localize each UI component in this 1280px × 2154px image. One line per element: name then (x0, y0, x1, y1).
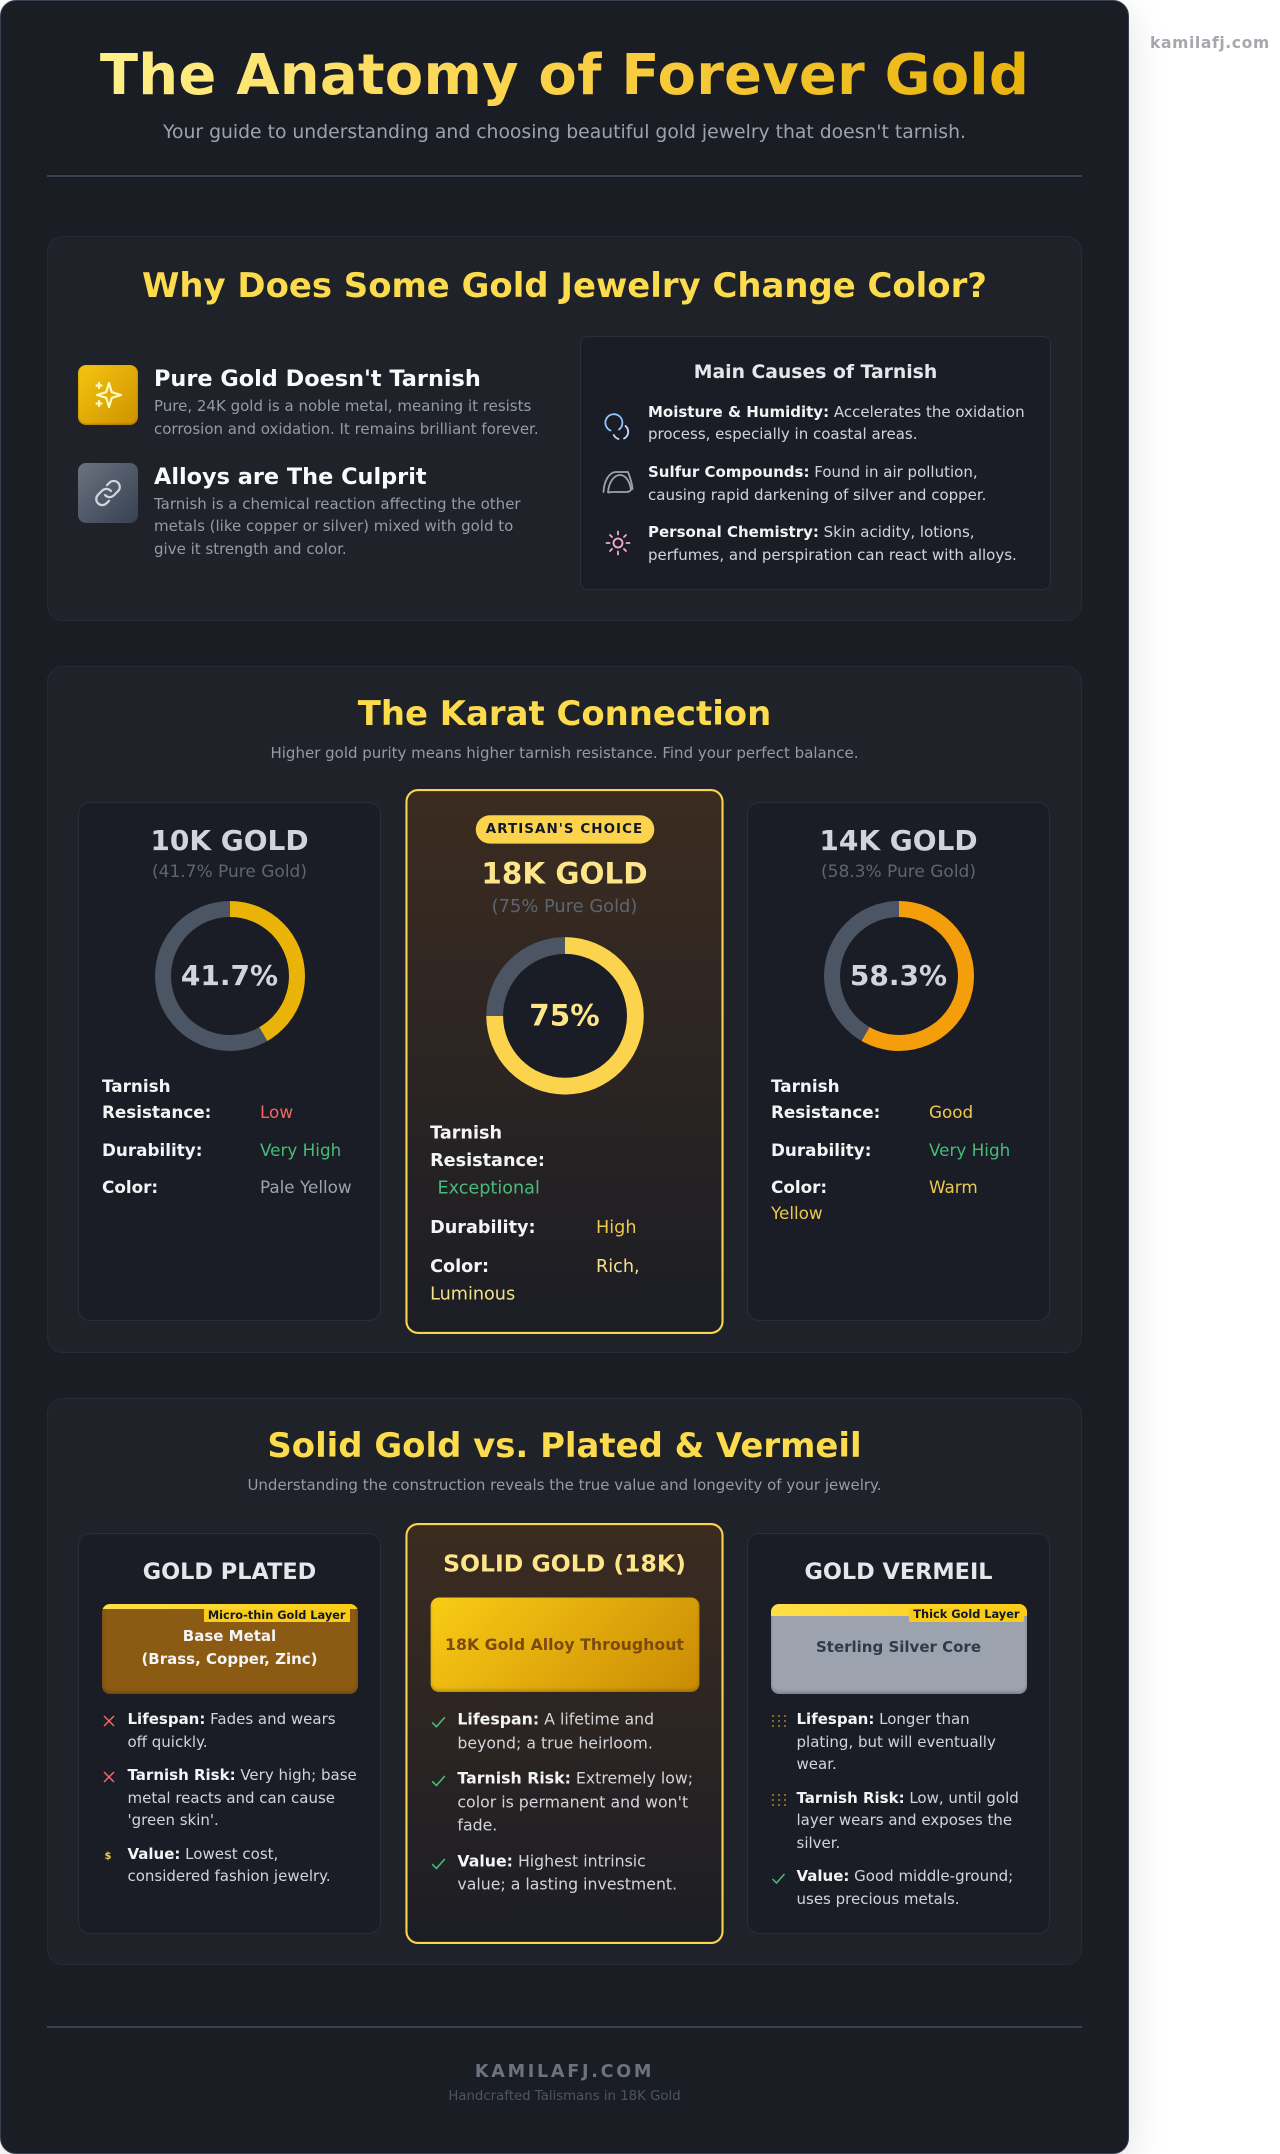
stats: Color: (430, 1256, 489, 1277)
card: gold vermeil (747, 1533, 1050, 1934)
item: lifespan: beyond; a true heirloom. (457, 1734, 653, 1752)
stats: Durability: (771, 1140, 871, 1160)
feature list (772, 1710, 1019, 1908)
item: tarnish risk: Tarnish Risk: Extremely low; (457, 1769, 693, 1788)
footer brand: KAMILAFJ.COM (475, 2062, 654, 2082)
badge: ARTISAN'S CHOICE (486, 822, 643, 837)
item: tarnish risk: Tarnish Risk: Very high; base (128, 1766, 357, 1784)
description (154, 397, 539, 438)
card title: GOLD VERMEIL (804, 1559, 993, 1585)
card title: GOLD PLATED (143, 1559, 316, 1585)
card: 14K gold (747, 802, 1050, 1321)
item: tarnish risk (772, 1789, 1019, 1852)
badge (475, 815, 654, 844)
panel: solid vs plated vs vermeil (47, 1398, 1082, 1965)
feature list (104, 1710, 357, 1885)
donut: 75%: 75% (529, 998, 600, 1033)
panel: main causes of tarnish (580, 336, 1051, 590)
card: solid gold (405, 1523, 724, 1944)
footer tagline: Handcrafted Talismans in 18K Gold (448, 2089, 681, 2104)
card: 10K gold (78, 802, 381, 1321)
stats (430, 1122, 640, 1304)
purity: (58.3% Pure Gold) (821, 862, 976, 882)
stats: Exceptional (437, 1176, 540, 1197)
cause: sulfur: Sulfur Compounds: Found in air pollution, (648, 463, 978, 481)
item: tarnish risk: 'green skin'. (128, 1811, 219, 1829)
subtitle: Your guide to understanding and choosing beautiful gold jewelry that doesn't tarnish. (163, 122, 966, 143)
stats: Low (260, 1102, 293, 1122)
layer label: Micro-thin Gold Layer (208, 1608, 346, 1622)
description: give it strength and color. (154, 540, 347, 558)
item: lifespan: Lifespan: A lifetime and (457, 1710, 654, 1729)
cause: sulfur (648, 463, 986, 504)
description: metals (like copper or silver) mixed with gold to (154, 517, 513, 535)
stats: Color: (771, 1177, 827, 1197)
block: pure gold doesn't tarnish (154, 366, 539, 438)
icon: sparkles (78, 365, 138, 425)
diagram: vermeil layers (770, 1604, 1026, 1694)
heading: why does gold change color: Why Does Some Gold Jewelry Change Color? (142, 266, 987, 305)
description (154, 494, 521, 558)
heading: Pure Gold Doesn't Tarnish (154, 366, 481, 392)
section subtitle: Higher gold purity means higher tarnish resistance. Find your perfect balance. (270, 744, 858, 762)
stats: Durability: (102, 1140, 202, 1160)
donut: 41.7%: 41.7% (181, 959, 278, 992)
block: alloys are the culprit (154, 464, 521, 558)
diagram: plated layers (102, 1604, 358, 1694)
panel: karat connection (47, 666, 1082, 1353)
item: tarnish risk: silver. (796, 1834, 840, 1852)
card: gold plated (78, 1533, 381, 1934)
icon: droplets (604, 413, 630, 440)
item: lifespan: plating, but will eventually (796, 1732, 996, 1750)
heading: solid vs plated: Solid Gold vs. Plated & Vermeil (267, 1426, 862, 1465)
diagram: plated layers: Base Metal (183, 1627, 276, 1645)
item: value (772, 1867, 1013, 1908)
icon: sulfur cloud (602, 471, 634, 494)
heading: karat connection: The Karat Connection (358, 694, 771, 733)
donut: 58.3%: 58.3% (850, 959, 947, 992)
icon: sun (606, 530, 630, 556)
purity: (75% Pure Gold) (492, 896, 637, 917)
cause: sulfur: causing rapid darkening of silver and copper. (648, 486, 986, 504)
section subtitle: Understanding the construction reveals the true value and longevity of your jewelry. (247, 1476, 882, 1494)
card: 18K gold (405, 789, 724, 1334)
stats (771, 1076, 1010, 1223)
karat name: 10K GOLD (150, 824, 309, 857)
icon: chain link (78, 463, 138, 523)
cause: moisture: process, especially in coastal areas. (648, 425, 917, 443)
item: tarnish risk: Tarnish Risk: Low, until gold (796, 1789, 1019, 1807)
item: lifespan (432, 1710, 654, 1752)
item: value (104, 1845, 331, 1885)
item: lifespan: Lifespan: Longer than (796, 1710, 970, 1728)
item: value: considered fashion jewelry. (128, 1867, 331, 1885)
donut: 58.3% (824, 901, 974, 1051)
stats: High (596, 1216, 637, 1237)
stats: Very High (929, 1140, 1010, 1160)
cause: moisture (648, 402, 1025, 443)
stats: Tarnish Resistance: (102, 1076, 211, 1122)
cause: moisture: Moisture & Humidity: Accelerates the oxidation (648, 402, 1025, 420)
item: lifespan (104, 1710, 336, 1750)
stats: Good (929, 1102, 973, 1122)
stats: Tarnish Resistance: (430, 1122, 545, 1170)
item: value: value; a lasting investment. (457, 1875, 677, 1894)
donut: 75% (486, 937, 643, 1095)
item: value: Value: Good middle-ground; (796, 1867, 1013, 1885)
heading: main causes: Main Causes of Tarnish (694, 362, 937, 383)
diagram: plated layers: (Brass, Copper, Zinc) (141, 1650, 318, 1668)
item: tarnish risk: color is permanent and won't (457, 1792, 688, 1811)
item: lifespan: Lifespan: Fades and wears (128, 1710, 336, 1728)
heading: Alloys are The Culprit (154, 464, 427, 490)
description: Pure, 24K gold is a noble metal, meaning it resists (154, 397, 531, 415)
stats: Color: (102, 1177, 158, 1197)
item: lifespan: wear. (796, 1755, 837, 1773)
stats: Durability: (430, 1216, 536, 1237)
description: Tarnish is a chemical reaction affecting the other (154, 494, 521, 512)
item: value: $ (104, 1851, 111, 1862)
item: tarnish risk (432, 1769, 693, 1835)
donut: 41.7% (154, 901, 304, 1051)
item: value: Value: Lowest cost, (128, 1845, 278, 1863)
layer label: Thick Gold Layer (913, 1607, 1020, 1621)
stats: Rich, Luminous (430, 1256, 640, 1304)
item: lifespan: off quickly. (128, 1732, 208, 1750)
item: value: Value: Highest intrinsic (457, 1851, 646, 1870)
stats: Tarnish Resistance: (771, 1076, 880, 1122)
item: tarnish risk: metal reacts and can cause (128, 1789, 335, 1807)
stats: Very High (260, 1140, 341, 1160)
item: lifespan (772, 1710, 996, 1773)
cause: chemistry: perfumes, and perspiration can react with alloys. (648, 546, 1017, 564)
item: tarnish risk: fade. (457, 1816, 497, 1835)
item: value (432, 1851, 677, 1894)
cause: chemistry (648, 523, 1017, 564)
feature list (432, 1710, 693, 1894)
stats: Pale Yellow (260, 1177, 352, 1197)
panel: why does gold change color (47, 236, 1082, 621)
title: The Anatomy of Forever Gold (100, 43, 1029, 108)
diagram: solid gold: 18K Gold Alloy Throughout (445, 1635, 684, 1654)
stats (102, 1076, 352, 1197)
item: tarnish risk: layer wears and exposes the (796, 1811, 1012, 1829)
purity: (41.7% Pure Gold) (152, 862, 307, 882)
diagram: solid gold (430, 1598, 699, 1692)
diagram: vermeil layers: Sterling Silver Core (816, 1638, 981, 1656)
card title: SOLID GOLD (18K) (443, 1550, 686, 1578)
cause: chemistry: Personal Chemistry: Skin acidity, lotions, (648, 523, 975, 541)
description: corrosion and oxidation. It remains brilliant forever. (154, 420, 539, 438)
watermark: kamilafj.com (1150, 34, 1270, 52)
item: tarnish risk (104, 1766, 357, 1829)
stats: Warm Yellow (771, 1177, 978, 1223)
karat name: 14K GOLD (819, 824, 978, 857)
item: value: uses precious metals. (796, 1890, 960, 1908)
karat name: 18K GOLD (481, 856, 648, 891)
